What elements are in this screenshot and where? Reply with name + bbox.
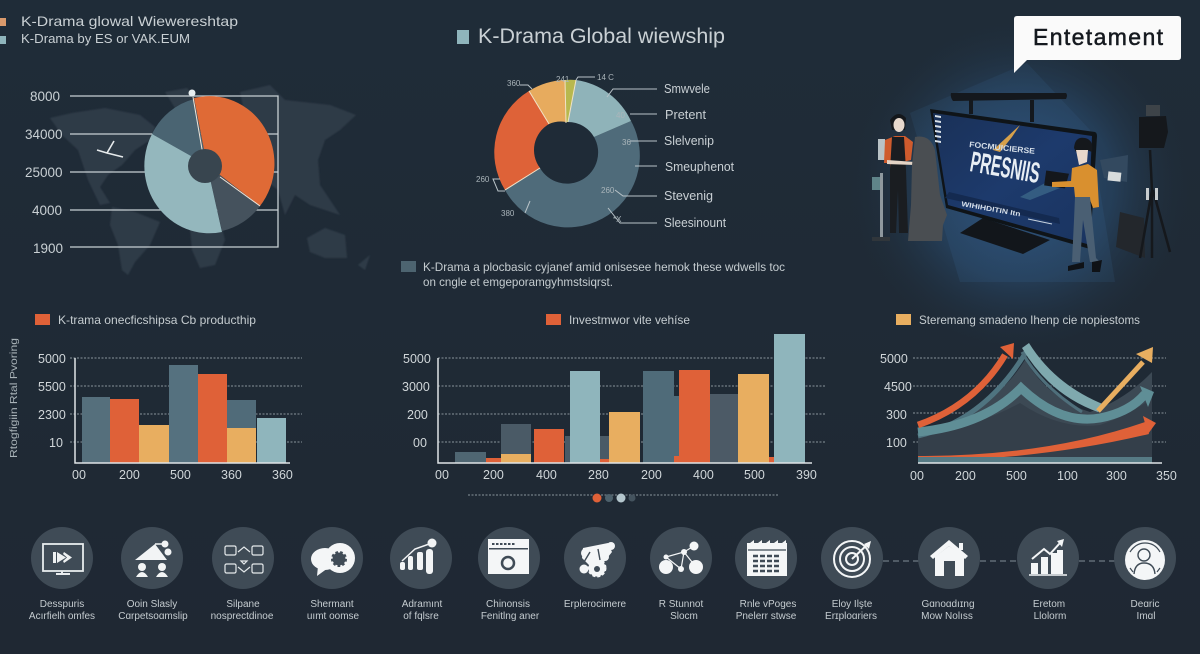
axis labels: 00 [435,468,449,482]
axis labels: 200 [641,468,662,482]
pagination dots [468,494,778,502]
axis labels: 2300 [38,408,66,422]
axis labels: 5000 [880,352,908,366]
icon 3: linked squares: Silpane [226,599,260,610]
dashed connectors [883,560,1115,562]
legend: top left: K-Drama glowal Wiewereshtap [21,13,238,29]
donut value labels: 260 [476,175,490,184]
axis labels: 400 [693,468,714,482]
y axis labels: 8000 [30,89,60,104]
icon 10: target: Eloy Ilşte [832,599,873,610]
grid [913,358,1166,442]
axis labels: 5000 [403,352,431,366]
monitor: FOCMUICIERSE [969,140,1036,156]
panel: production illustration [840,16,1200,360]
donut [494,80,640,227]
icon 4: speech gear: Shermant [310,599,354,610]
monitor: WIHIHDITIN Itn [961,201,1021,218]
speech bubble [1014,16,1181,73]
axis labels: 300 [1106,469,1127,483]
icon 6: browser window [478,527,540,622]
axis labels: 500 [170,468,191,482]
icon 7: gears network [564,527,627,610]
icon 1: monitor play: Desspuris [40,599,84,610]
camera on tripod [1139,105,1170,258]
monitor [930,93,1097,254]
icon 12: rising chart: Llolorm [1034,611,1066,622]
icon 8: node network [650,527,712,622]
area fills [918,360,1152,463]
axis labels: 360 [221,468,242,482]
axis labels: 10 [49,436,63,450]
panel: donut chart [401,25,785,289]
icon 10: target [821,527,883,622]
axis labels: 350 [1156,469,1177,483]
icon 11: house: Gɑnoɑdıɪng [921,599,975,610]
axis labels: 5500 [38,380,66,394]
icon 6: browser window: Fenitlng aner [481,611,540,622]
donut value labels: 36 [622,138,631,147]
pointer dot [188,90,196,96]
axis labels: 200 [407,408,428,422]
axis labels [880,352,1177,483]
speech bubble: Entetament [1033,24,1164,50]
panel: investment bar chart [402,313,825,502]
donut value labels [476,73,631,224]
trend bands [918,343,1154,436]
icon 8: node network: R Stunnot [659,599,703,610]
axis labels: 200 [955,469,976,483]
axis labels: 200 [483,468,504,482]
icon 10: target: Erɪploɑriers [825,611,877,622]
panel: global viewership map and pie [0,13,370,275]
world map [50,85,370,275]
axis labels: 5000 [38,352,66,366]
icon 5: growth bars [390,527,452,622]
clapper tag [1100,155,1128,182]
donut category labels: Pretent [665,108,707,122]
grid [70,358,302,442]
legend: top left: K-Drama by ES or VAK.EUM [21,31,190,46]
chart heading: K-trama onecficshipsa Cb producthip [58,313,256,327]
donut description [401,260,785,289]
icon 11: house [918,527,980,622]
donut description: K-Drama a plocbasic cyjanef amid oniseseе hemok these wdwells toc [423,260,785,274]
axis labels: 200 [119,468,140,482]
icon 1: monitor play [29,527,95,622]
axes [438,358,812,463]
axis labels: 00 [910,469,924,483]
donut description: on cngle et emgeporamgyhmstsiqrst. [423,275,613,289]
pie chart [144,96,274,233]
y axis labels: 25000 [25,165,63,180]
monitor: PRESNIIS [968,146,1042,190]
icon 3: linked squares [211,527,274,622]
icon 5: growth bars: Adramınt [402,599,443,610]
y axis labels [25,89,63,256]
suitcase [1116,212,1145,258]
lamp stand [872,173,890,241]
icon 2: people under roof [118,527,188,622]
presenter left [878,114,915,233]
y axis labels: 34000 [25,127,63,142]
donut category labels: Stevenig [664,189,713,203]
icon 13: user cycle: Deɑric [1131,599,1159,610]
axis labels [38,352,293,482]
axis labels: 360 [272,468,293,482]
donut category labels: Smeuphenot [665,160,735,174]
panel: streaming trend chart [880,313,1177,483]
rising arrows [918,343,1156,463]
axis labels: 500 [1006,469,1027,483]
icon 9: calendar: Rnle vPoɡes [740,599,796,610]
icon 13: user cycle: Imɑl [1137,611,1155,622]
icon 6: browser window: Chinonsis [486,599,530,610]
axis labels: 500 [744,468,765,482]
axis labels: 4500 [884,380,912,394]
icon 2: people under roof: Cɑrpetsoɑmslip [118,611,188,622]
donut value labels: 40 [616,111,625,120]
icon 1: monitor play: Acırfielh omfes [29,611,95,622]
axes [75,358,290,463]
garment coat [908,137,947,241]
y axis title: Rtogfigiin Rtal Pvoring [8,338,20,458]
legend: top left [0,13,238,46]
spotlight glow [840,20,1200,360]
icon row [29,527,1176,622]
axis labels: 100 [1057,469,1078,483]
panel: bar chart production [8,313,302,482]
axis labels: 3000 [402,380,430,394]
axis labels: 390 [796,468,817,482]
icon 9: calendar [735,527,797,622]
y axis labels: 1900 [33,241,63,256]
axis labels: 300 [886,408,907,422]
donut value labels: 14 C [597,73,614,82]
icon 9: calendar: Pnelerr stwse [736,611,797,622]
axis labels: 400 [536,468,557,482]
icon 12: rising chart [1017,527,1079,622]
donut value labels: 241 [556,75,570,84]
donut value labels: 260 [601,186,615,195]
bars [455,334,805,463]
donut value labels: 360 [507,79,521,88]
icon 8: node network: Slocm [670,611,698,622]
axis labels [402,352,817,482]
y axis labels: 4000 [32,203,62,218]
bars [82,365,286,463]
icon 11: house: Mow Nolıss [921,611,973,622]
donut category labels: Smwvele [664,82,710,96]
donut category labels: Sleesinount [664,216,726,230]
icon 12: rising chart: Eretom [1033,599,1065,610]
donut category labels [664,82,735,230]
icon 5: growth bars: of fqlsre [403,611,439,622]
icon 13: user cycle [1114,527,1176,622]
axis lines [70,96,278,247]
axis labels: 100 [886,436,907,450]
donut leader lines [493,77,657,223]
icon 4: speech gear [301,527,363,622]
map marker [97,141,123,157]
donut category labels: Slelvenip [664,134,714,148]
axis labels: 00 [72,468,86,482]
chart heading: Steremang smadeno Ihenp cie nopiestoms [919,313,1140,327]
chart heading: Investmwor vite vehíse [569,313,690,327]
icon 3: linked squares: nosprectdinoe [211,611,274,622]
axes [918,462,1162,464]
donut value labels: *X [613,215,622,224]
icon 2: people under roof: Ooin Slasly [127,599,177,610]
axis labels: 280 [588,468,609,482]
donut value labels: 380 [501,209,515,218]
grid [438,358,825,442]
presenter right [1044,138,1102,272]
icon 4: speech gear: uımt oomse [307,611,360,622]
donut title: K-Drama Global wiewship [478,25,725,48]
icon 7: gears network: Erplerocimere [564,599,627,610]
axis labels: 00 [413,436,427,450]
